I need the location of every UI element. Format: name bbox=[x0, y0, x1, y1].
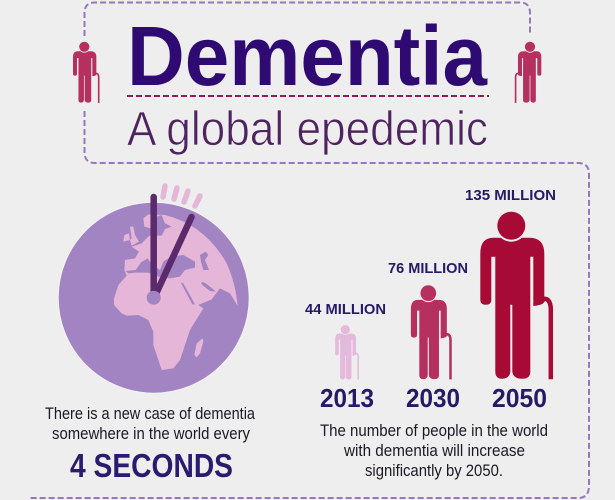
person 2013 bbox=[335, 324, 358, 380]
label 76 million: 76 MILLION bbox=[388, 260, 468, 277]
person 2030 bbox=[411, 284, 450, 379]
text: increase caption: with dementia will increase bbox=[343, 441, 525, 460]
clock pivot bbox=[147, 291, 161, 305]
title: Dementia bbox=[127, 9, 488, 103]
label 135 million: 135 MILLION bbox=[465, 187, 556, 204]
person 2050 bbox=[480, 210, 551, 379]
seas bbox=[126, 255, 195, 278]
title divider bbox=[127, 95, 489, 97]
land masses bbox=[114, 214, 238, 370]
text: increase caption: significantly by 2050. bbox=[365, 461, 503, 480]
motion ticks bbox=[163, 186, 200, 206]
icon: person left bbox=[73, 41, 99, 103]
chart: people with dementia bbox=[305, 187, 556, 413]
year 2030: 2030 bbox=[406, 383, 460, 413]
Madagascar bbox=[194, 338, 203, 357]
subtitle: A global epedemic bbox=[127, 103, 488, 156]
year 2050: 2050 bbox=[492, 383, 547, 413]
text: new case caption: There is a new case of dementia bbox=[45, 404, 255, 423]
text: new case caption bbox=[45, 404, 255, 443]
year 2013: 2013 bbox=[320, 383, 374, 413]
text: increase caption bbox=[320, 421, 548, 480]
icon: person right bbox=[516, 41, 541, 103]
globe bbox=[58, 202, 249, 393]
label 44 million: 44 MILLION bbox=[305, 301, 386, 318]
text: new case caption: somewhere in the world every bbox=[52, 424, 250, 443]
globe clock bbox=[58, 186, 249, 393]
UK and Ireland bbox=[123, 227, 139, 246]
clock hands bbox=[154, 197, 192, 296]
text: increase caption: The number of people in the world bbox=[320, 421, 548, 440]
stat: 4 seconds: 4 SECONDS bbox=[70, 447, 233, 484]
